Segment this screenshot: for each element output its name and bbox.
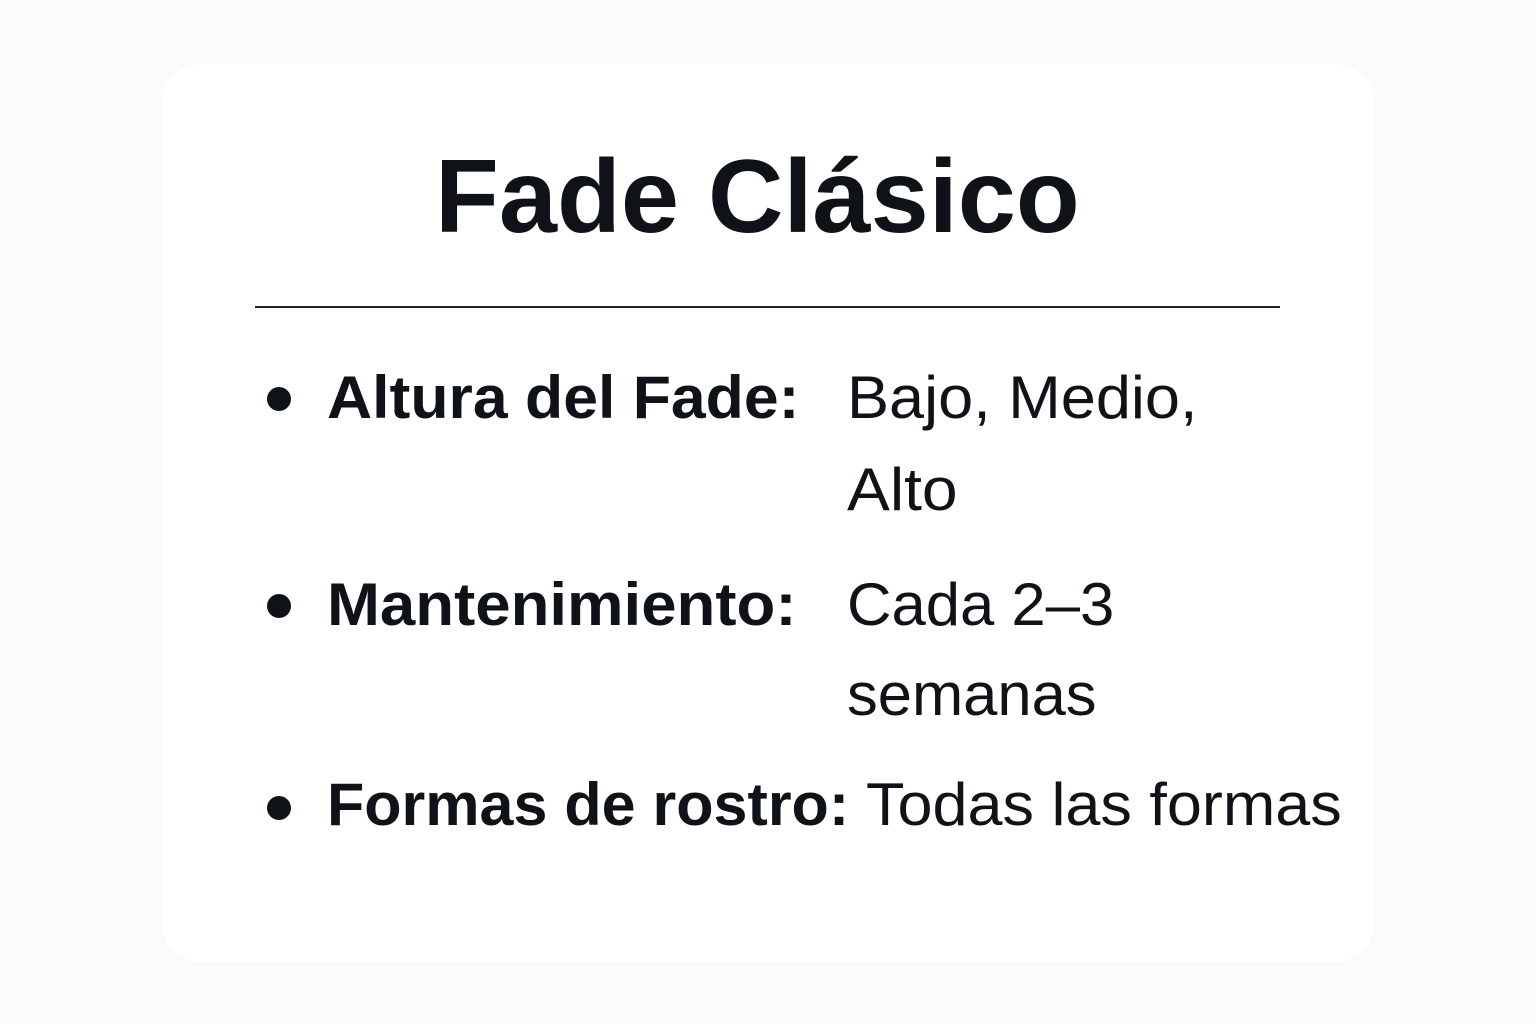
- list item: formas de rostro: [267, 771, 1342, 838]
- value: Cada 2–3: [847, 571, 1114, 638]
- bullet: [267, 387, 291, 411]
- bullet: [267, 594, 291, 618]
- value: semanas: [847, 661, 1097, 728]
- value: [847, 364, 1198, 523]
- label: Altura del Fade:: [327, 364, 799, 431]
- list item: altura del fade: [267, 364, 1198, 523]
- bullet: [267, 796, 291, 820]
- value: [847, 571, 1114, 728]
- label: Formas de rostro:: [327, 771, 849, 838]
- value: Alto: [847, 456, 958, 523]
- value: Todas las formas: [866, 771, 1342, 838]
- panel: card: [161, 64, 1375, 962]
- list item: mantenimiento: [267, 571, 1114, 728]
- value: Bajo, Medio,: [847, 364, 1198, 431]
- label: Mantenimiento:: [327, 571, 796, 638]
- title: Fade Clásico: [435, 139, 1080, 255]
